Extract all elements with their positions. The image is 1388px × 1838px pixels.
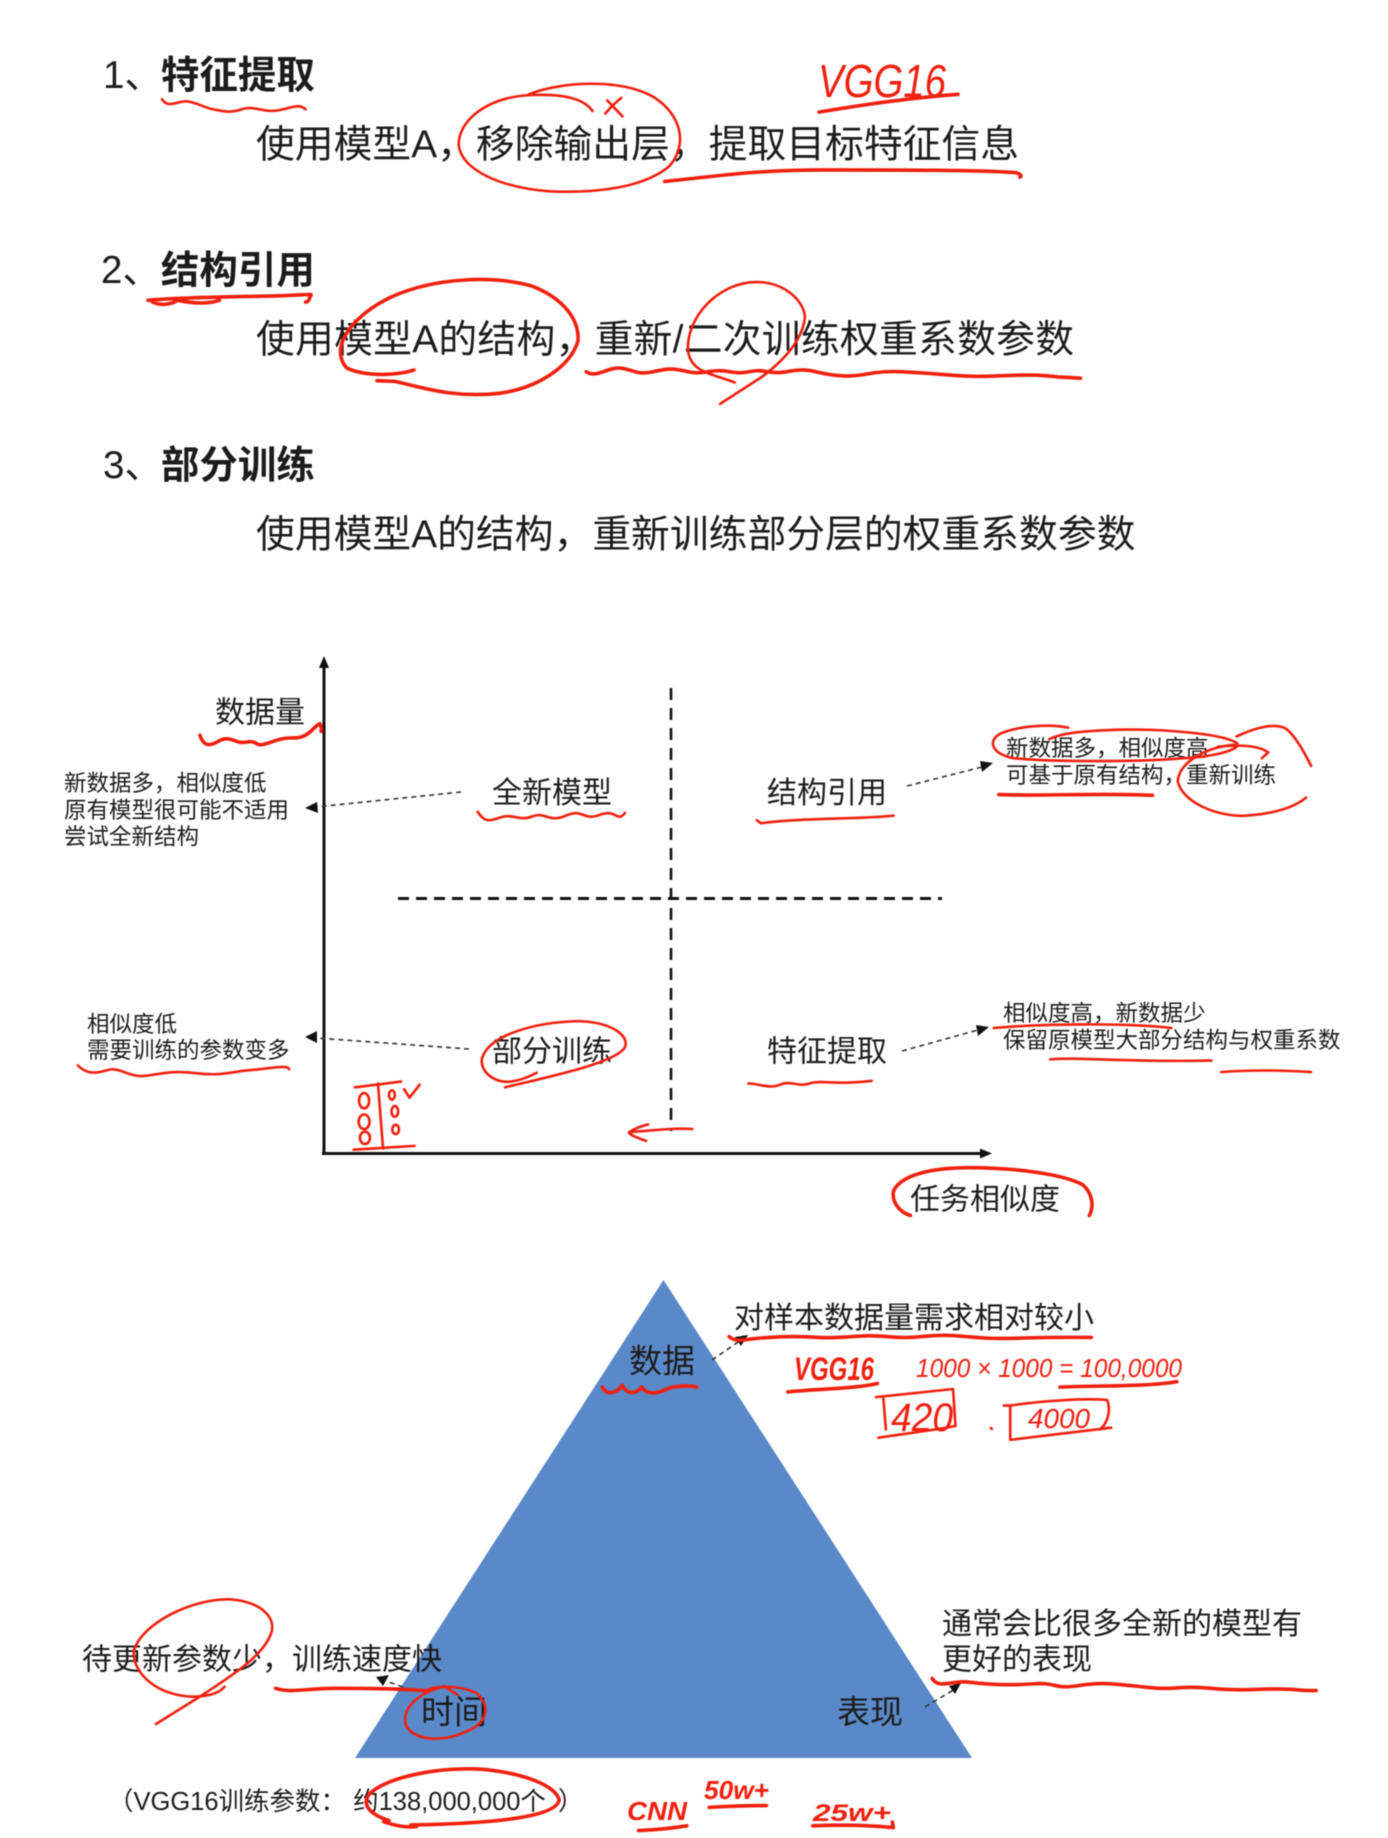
- arrow: red left arrow: [629, 1124, 692, 1141]
- label: data volume: 数据量: [215, 696, 305, 730]
- text: new model explanation: 原有模型很可能不适用: [64, 798, 289, 822]
- annotation: retain structure underline: [1050, 1059, 1211, 1061]
- annotation: box around 4000: [991, 1399, 1111, 1440]
- text: partial training explanation: 需要训练的参数变多: [87, 1038, 290, 1062]
- chart: triangle of data, time and performance: [82, 1280, 1316, 1831]
- panel: section 2 structure reuse: [101, 249, 1080, 404]
- annotation: handwritten VGG16: VGG16: [818, 55, 946, 107]
- text: section 3 description: 使用模型A的结构，重新训练部分层的权重系数参数: [256, 514, 1135, 556]
- chart axis: task similarity: [322, 1148, 992, 1158]
- annotation: feature extraction wavy underline: [748, 1081, 872, 1086]
- annotation: 25w underline: [813, 1822, 893, 1828]
- annotation: VGG16 underline: [819, 94, 958, 112]
- annotation: handwritten 420: 420: [891, 1396, 953, 1440]
- annotation: handwritten CNN: CNN: [627, 1796, 688, 1826]
- text: feature extraction explanation: 相似度高，新数据少: [1003, 1000, 1206, 1026]
- annotation: training speed underline: [276, 1688, 427, 1691]
- chart: quadrant of data volume versus similarity: [64, 656, 1341, 1216]
- text: structure reuse explanation: 新数据多，相似度高: [1006, 736, 1209, 760]
- annotation: circle around time: [405, 1686, 485, 1739]
- annotation: triangle red marks right: [602, 1335, 1316, 1831]
- text: section 1 description: 使用模型A，移除输出层，提取目标特征信息: [256, 124, 1019, 166]
- annotation: product underline: [1060, 1382, 1177, 1387]
- annotation: performance wavy underline: [932, 1678, 1316, 1691]
- annotation: handwritten 25w+: 25w+: [812, 1800, 891, 1827]
- annotation: section 2 red marks: [148, 280, 1080, 404]
- chart axis: data volume: [319, 656, 329, 1154]
- panel: section 3 partial training: [103, 444, 1135, 556]
- annotation: retrain wavy underline: [586, 368, 1080, 378]
- annotation: 50w underline: [709, 1806, 766, 1807]
- label: performance: 表现: [837, 1694, 903, 1730]
- annotation: handwritten 4000: 4000: [1028, 1403, 1090, 1434]
- annotation: triangle red marks left: [134, 1599, 559, 1827]
- text: feature extraction explanation: 保留原模型大部分结构与权重系数: [1003, 1028, 1341, 1052]
- text: section 2 description: 使用模型A的结构，重新/二次训练权重系数参数: [256, 318, 1074, 362]
- annotation: circle around task similarity: [893, 1168, 1092, 1216]
- annotation: CNN underline: [639, 1826, 687, 1831]
- annotation: heading wavy underline: [162, 99, 306, 112]
- text: VGG16 parameter note: （VGG16训练参数： 约138,000,000个 ）: [108, 1788, 583, 1816]
- annotation: circle around remove output layer: [459, 84, 680, 192]
- arrow: structure reuse to explanation: [907, 761, 993, 786]
- annotation: partial training explanation underline: [78, 1066, 289, 1076]
- text: partial training explanation: 相似度低: [87, 1012, 177, 1036]
- text: data benefit: 对样本数据量需求相对较小: [734, 1302, 1094, 1335]
- quadrant: new model: 全新模型: [492, 777, 612, 810]
- arrow: performance to benefit: [925, 1683, 961, 1707]
- annotation: high similarity underline: [994, 1024, 1171, 1028]
- quadrant: structure reuse: 结构引用: [767, 777, 887, 810]
- text: new model explanation: 新数据多，相似度低: [64, 770, 267, 796]
- icon: hand drawn network layers: [354, 1082, 420, 1150]
- arrow: new model to explanation: [305, 792, 461, 813]
- heading: 1 feature extraction: 1、特征提取: [103, 54, 315, 97]
- annotation: box around 420: [876, 1389, 956, 1438]
- annotation: cross mark: [605, 98, 623, 116]
- text: performance benefit: 更好的表现: [942, 1643, 1092, 1676]
- label: time: 时间: [421, 1694, 487, 1730]
- label: data: 数据: [629, 1342, 695, 1380]
- arrow: time to benefit: [376, 1675, 403, 1687]
- annotation: circle around retrain: [1178, 726, 1311, 816]
- annotation: section 1 red marks: [162, 84, 1021, 192]
- text: new model explanation: 尝试全新结构: [64, 824, 199, 849]
- annotation: new model wavy underline: [478, 812, 625, 820]
- text: time benefit: 待更新参数少，训练速度快: [82, 1644, 442, 1676]
- annotation: circle around partial training: [482, 1021, 626, 1087]
- annotation: data volume wavy underline: [200, 724, 321, 745]
- annotation: structure reuse underline: [757, 816, 894, 823]
- quadrant: partial training: 部分训练: [492, 1036, 612, 1068]
- annotation: heading underline: [148, 294, 311, 304]
- annotation: handwritten product: 1000 × 1000 = 100,0000: [916, 1353, 1183, 1383]
- heading: 2 structure reuse: 2、结构引用: [101, 249, 315, 292]
- text: performance benefit: 通常会比很多全新的模型有: [942, 1608, 1302, 1640]
- annotation: based on structure underline: [999, 793, 1152, 797]
- heading: 3 partial training: 3、部分训练: [103, 444, 315, 487]
- triangle: [355, 1280, 972, 1758]
- annotation: circle around more data high similarity: [993, 726, 1238, 761]
- annotation: data benefit underline: [729, 1335, 1091, 1340]
- annotation: circle around secondary training: [688, 282, 805, 404]
- arrow: data to benefit: [712, 1335, 748, 1360]
- arrow: feature extraction to explanation: [902, 1025, 989, 1051]
- label: task similarity: 任务相似度: [910, 1184, 1060, 1216]
- annotation: target features underline: [665, 170, 1021, 181]
- annotation: circle around update parameters: [134, 1599, 272, 1724]
- annotation: circle around model structure: [340, 280, 578, 395]
- annotation: left chart red marks: [78, 724, 692, 1150]
- quadrant: feature extraction: 特征提取: [767, 1036, 887, 1068]
- annotation: handwritten VGG16: VGG16: [794, 1351, 874, 1387]
- arrow: partial training to explanation: [305, 1031, 469, 1049]
- annotation: weights underline: [1221, 1071, 1311, 1072]
- annotation: circle around parameter count: [366, 1769, 559, 1827]
- annotation: right chart red marks: [748, 726, 1311, 1216]
- text: structure reuse explanation: 可基于原有结构，重新训练: [1006, 762, 1276, 788]
- panel: section 1 feature extraction: [103, 54, 1021, 192]
- annotation: VGG16 underline: [788, 1383, 877, 1392]
- annotation: data wavy underline: [602, 1385, 697, 1393]
- annotation: handwritten 50w+: 50w+: [704, 1775, 769, 1805]
